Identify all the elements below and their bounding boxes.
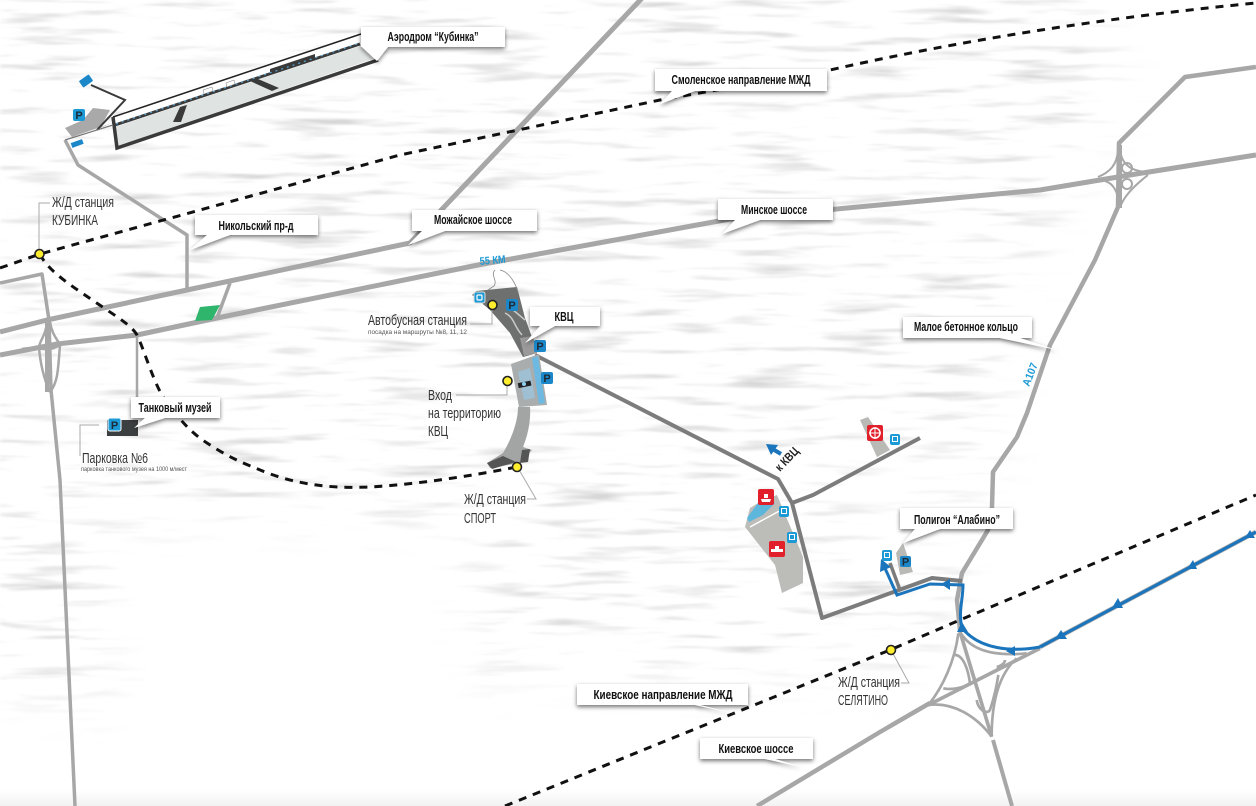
interchange north-east <box>1098 145 1150 208</box>
station: вход <box>428 376 512 440</box>
station: вход: Вход <box>428 388 452 404</box>
background streak texture <box>0 0 1121 700</box>
callout: Аэродром Кубинка: Аэродром “Кубинка” <box>388 30 478 44</box>
55 km marker: 55 КМ <box>479 254 506 268</box>
label: Парковка №6: Парковка №6 <box>82 451 148 467</box>
label: А107: А107 <box>1021 361 1041 388</box>
callout: Танковый музей: Танковый музей <box>138 401 212 415</box>
icon: ship museum <box>758 489 774 505</box>
arrow: к КВЦ: к КВЦ <box>772 444 802 474</box>
complex: central part <box>511 354 547 407</box>
pond <box>747 503 775 522</box>
route arrows <box>1187 560 1197 569</box>
icon: parking KVC east <box>541 372 553 385</box>
road: Киевское шоссе <box>757 703 930 806</box>
green area <box>195 305 220 321</box>
note: parking №6: парковка танкового музея на 1000 м/мест <box>81 466 187 473</box>
callout: Никольский пр-д: Никольский пр-д <box>218 219 294 233</box>
callout: Киевское шоссе <box>700 738 813 767</box>
icon: parking polygon <box>900 556 911 568</box>
interchange west <box>22 322 62 392</box>
callout: Малое бетонное кольцо: Малое бетонное кольцо <box>914 320 1018 334</box>
icon: tank museum <box>769 541 785 557</box>
icon: parking KVC centre: P <box>536 341 544 353</box>
icon: bus 2 <box>787 532 797 543</box>
road: branch to green area <box>217 283 230 318</box>
station: вход: КВЦ <box>428 424 448 440</box>
station: автобусная: Автобусная станция <box>368 313 467 329</box>
parking №6 block: P <box>111 420 118 432</box>
road: to tank museum <box>136 335 138 400</box>
station: Селятино: СЕЛЯТИНО <box>838 693 888 709</box>
site: museum area <box>745 495 803 593</box>
callout: Можайское шоссе: Можайское шоссе <box>434 213 512 227</box>
icon: bus polygon <box>882 550 892 561</box>
complex: southern part <box>487 407 532 468</box>
station: Кубинка <box>35 195 114 258</box>
station: Селятино <box>838 646 909 709</box>
leader: parking №6 <box>80 425 99 456</box>
Alabino objects <box>745 417 913 593</box>
station: Спорт: Ж/Д станция <box>464 492 526 508</box>
callout: КВЦ <box>525 307 600 343</box>
callout: Полигон Алабино: Полигон “Алабино” <box>914 513 1000 527</box>
callout: Танковый музей <box>131 397 220 428</box>
interchange south-east <box>928 632 1040 737</box>
road: A107 <box>957 67 1256 630</box>
railway: Кубинка — Спорт <box>40 254 517 487</box>
callout: Можайское шоссе <box>408 210 537 245</box>
airfield Кубинка <box>113 34 378 148</box>
airfield parking <box>65 74 125 148</box>
arrow: к КВЦ <box>766 444 802 474</box>
callout: Никольский пр-д <box>190 215 318 250</box>
callout: Смоленское направление МЖД <box>655 69 827 104</box>
callout: Киевское направление МЖД <box>577 684 748 714</box>
callout: КВЦ: КВЦ <box>554 310 574 324</box>
road: branch north-east <box>792 438 920 503</box>
icon: parking KVC north: P <box>508 300 516 312</box>
station: автобусная: посадка на маршруты №8, 11, 12 <box>368 329 467 336</box>
callout: Киевское шоссе: Киевское шоссе <box>718 742 794 756</box>
station: Селятино: Ж/Д станция <box>838 675 900 691</box>
icon: parking KVC centre <box>534 340 546 353</box>
KVC complex <box>472 287 547 469</box>
callout: Смоленское направление МЖД: Смоленское направление МЖД <box>672 73 811 87</box>
road: Минское шоссе <box>0 155 1256 355</box>
site: polygon <box>896 543 913 575</box>
road: east highway <box>1040 532 1256 647</box>
road: branch to polygon <box>890 563 900 590</box>
road: Никольский пр-д <box>65 140 187 290</box>
station: Кубинка: Ж/Д станция <box>52 195 114 211</box>
icon: bus 1 <box>779 506 789 517</box>
bus route <box>880 530 1256 656</box>
callout: Малое бетонное кольцо <box>903 317 1057 350</box>
icon: parking polygon: P <box>902 556 909 568</box>
parking №6 block <box>107 418 138 436</box>
road: to КВЦ and Алабино <box>535 355 962 618</box>
station: Спорт: СПОРТ <box>464 511 496 527</box>
icon: parking KVC east: P <box>543 373 551 385</box>
callout: Аэродром Кубинка <box>361 27 505 61</box>
station: Кубинка: КУБИНКА <box>52 213 98 229</box>
station: Спорт <box>464 462 536 527</box>
55 km marker <box>479 254 518 292</box>
callout: Минское шоссе <box>718 199 833 234</box>
road: Можайское шоссе <box>0 0 645 332</box>
site: north-east <box>860 417 890 457</box>
station: автобусная <box>368 300 497 336</box>
railway: Киевское направление <box>505 495 1256 806</box>
road: south leg <box>993 740 1012 806</box>
airfield parking: P <box>75 110 83 122</box>
railway: Смоленское направление <box>0 3 1256 268</box>
icon: parking KVC north <box>506 299 518 312</box>
icon: bus target <box>890 434 900 445</box>
callout: Киевское направление МЖД: Киевское направление МЖД <box>594 688 733 702</box>
callout: Минское шоссе: Минское шоссе <box>741 203 807 217</box>
callout: Полигон Алабино <box>900 508 1013 543</box>
icon: target <box>867 425 883 441</box>
complex: north part <box>472 287 537 357</box>
icon: bus KVC <box>474 292 485 303</box>
station: вход: на территорию <box>428 406 501 422</box>
road: western north-south <box>0 274 75 806</box>
